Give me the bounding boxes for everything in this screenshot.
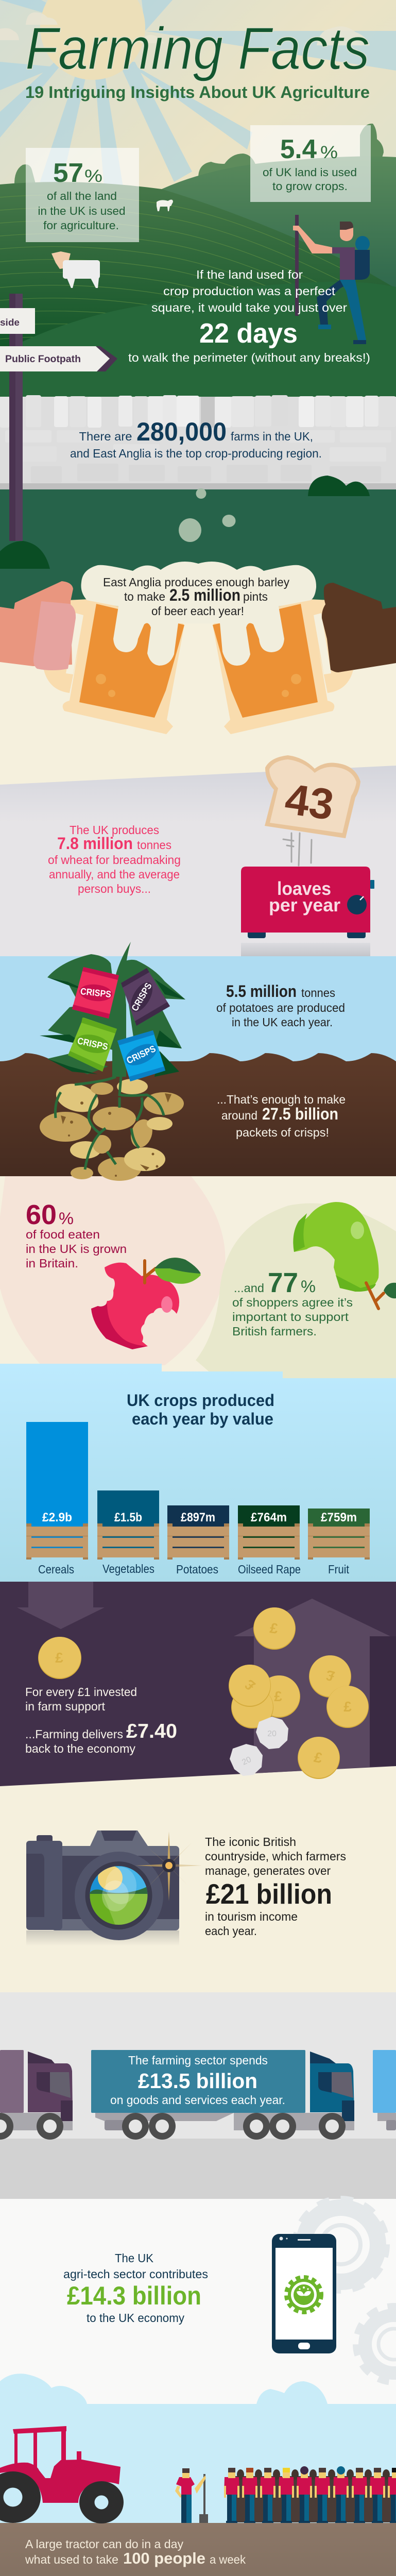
bar: vegetables xyxy=(97,1490,159,1560)
text: tractor fact: 100 people xyxy=(123,2549,205,2567)
icon: right beer mug xyxy=(213,599,353,734)
sun rays xyxy=(0,0,396,206)
callout: 57 percent xyxy=(26,148,139,242)
icon: smartphone xyxy=(272,2234,336,2353)
panel: fruit shoppers xyxy=(0,1176,396,1382)
text: farm count xyxy=(70,417,322,460)
coins: twenty pence xyxy=(230,1717,288,1776)
icon: purple crisps packet: CRISPS xyxy=(129,981,154,1013)
text: barley and beer: pints xyxy=(243,590,268,603)
back right hill xyxy=(162,157,396,330)
sign: countryside xyxy=(0,308,35,334)
icon: bitten apple xyxy=(91,1258,201,1349)
coins: returned pounds: £ xyxy=(274,1688,282,1704)
text: potato tonnes: 5.5 million xyxy=(226,982,297,1001)
bar: vegetables: £1.5b xyxy=(114,1511,142,1524)
icon: beer foam xyxy=(81,562,316,666)
chart title: UK crops produced xyxy=(127,1391,274,1410)
text: 77 percent: % xyxy=(301,1277,316,1296)
icon: small sheep xyxy=(157,200,173,211)
coins: returned pounds: £ xyxy=(269,1620,279,1637)
text: tourism income: in tourism income xyxy=(205,1910,298,1923)
text: crisp packets: packets of crisps! xyxy=(236,1126,329,1139)
text: tractor fact xyxy=(25,2537,246,2567)
pale backdrop circle xyxy=(196,1204,396,1382)
wall lower course xyxy=(5,430,391,483)
text: barley and beer: of beer each year! xyxy=(151,604,244,618)
icon: large gear watermark xyxy=(296,2199,396,2382)
trees on horizon xyxy=(14,124,384,185)
text: wheat xyxy=(48,823,181,895)
road xyxy=(0,2139,396,2199)
coin: single pound xyxy=(38,1637,81,1679)
icon: camera flash xyxy=(135,1832,202,1901)
bushes xyxy=(0,476,370,569)
text: barley and beer: East Anglia produces enough barley xyxy=(103,575,289,589)
coins: twenty pence: 20 xyxy=(267,1730,277,1738)
panel: signpost xyxy=(0,294,117,541)
icon: camera xyxy=(26,1831,202,1946)
text: 77 percent: ...and xyxy=(234,1281,264,1295)
icon: potatoes xyxy=(40,1079,184,1181)
callout: 5.4 percent: of UK land is used xyxy=(263,166,357,179)
text: barley and beer: to make xyxy=(124,590,165,603)
icon: farmer with fork xyxy=(175,2468,208,2523)
bar labels: Potatoes xyxy=(176,1563,218,1576)
text: barley and beer: 2.5 million xyxy=(169,586,240,604)
icon: tractor xyxy=(0,2426,124,2523)
icon: toast: 43 xyxy=(282,774,337,829)
text: tourism income xyxy=(205,1835,346,1938)
bar: oilseed rape: £764m xyxy=(251,1511,287,1524)
panel: wheat and bread xyxy=(0,755,396,956)
bar: potatoes xyxy=(167,1505,229,1560)
text: wheat: person buys... xyxy=(78,882,151,895)
text: farm support: back to the economy xyxy=(25,1742,136,1755)
text: tractor fact: what used to take xyxy=(25,2553,118,2566)
text: farm count: 280,000 xyxy=(136,417,227,446)
icon: toast xyxy=(265,755,360,838)
text: tourism income: countryside, which farmers xyxy=(205,1850,346,1863)
icon: red crisps packet xyxy=(72,967,119,1019)
text: crisp packets: ...That’s enough to make xyxy=(217,1093,346,1106)
coins: returned pounds: £ xyxy=(343,1699,352,1715)
icon: walker with staff xyxy=(293,215,370,344)
clouds xyxy=(0,2374,328,2404)
text block: 22 days to walk the perimeter: crop production was a perfect xyxy=(163,284,336,298)
text: farm count: There are xyxy=(79,430,132,443)
bar: fruit xyxy=(308,1509,370,1560)
panel: hero landscape xyxy=(0,0,396,420)
icon: centre truck xyxy=(95,2052,354,2140)
text: 60 percent xyxy=(26,1199,127,1270)
title: Farming Facts xyxy=(25,15,370,82)
text: crisp packets xyxy=(217,1093,346,1139)
icon: green crisps packet: CRISPS xyxy=(77,1036,109,1052)
text: agri-tech contribution: The UK xyxy=(115,2251,154,2265)
truck trailer with spend text: on goods and services each year. xyxy=(110,2093,285,2107)
icon: plant roots xyxy=(55,1077,164,1170)
bar labels: Vegetables xyxy=(102,1562,154,1575)
text block: 22 days to walk the perimeter: to walk the perimeter (without any breaks!) xyxy=(128,351,370,364)
text: 77 percent xyxy=(232,1267,353,1338)
truck trailer with spend text xyxy=(91,2050,305,2113)
wall upper stones xyxy=(0,395,396,428)
text: 60 percent: in Britain. xyxy=(26,1257,78,1270)
text: wheat: The UK produces xyxy=(70,823,159,837)
sun xyxy=(40,0,145,80)
panel: potatoes and crisps xyxy=(0,942,396,1181)
text: 77 percent: 77 xyxy=(268,1267,298,1298)
sign: countryside: side xyxy=(0,317,20,328)
text: tourism income: manage, generates over xyxy=(205,1864,331,1877)
left striped hill xyxy=(0,182,392,346)
ground xyxy=(0,2523,396,2576)
text: farm count: and East Anglia is the top crop-producing region. xyxy=(70,447,322,460)
text: wheat: 7.8 million xyxy=(57,834,133,853)
text: 77 percent: British farmers. xyxy=(232,1325,317,1338)
text: crisp packets: 27.5 billion xyxy=(262,1105,338,1123)
text: potato tonnes xyxy=(216,982,345,1029)
toast motion lines xyxy=(283,833,312,866)
callout: 57 percent: of all the land xyxy=(47,190,117,202)
callout: 5.4 percent xyxy=(250,125,371,202)
icon: left beer mug xyxy=(44,599,184,734)
icon: red crisps packet: CRISPS xyxy=(80,986,112,999)
text: agri-tech contribution xyxy=(63,2251,208,2325)
text: farm support: For every £1 invested xyxy=(25,1685,137,1699)
panel: crops bar chart xyxy=(0,1364,396,1582)
coins: returned pounds: £ xyxy=(324,1667,336,1685)
text: tractor fact: a week xyxy=(210,2553,246,2566)
text: crisp packets: around xyxy=(221,1109,257,1122)
coins: returned pounds: £ xyxy=(242,1676,258,1693)
callout: 5.4 percent: to grow crops. xyxy=(272,180,348,193)
text block: 22 days to walk the perimeter: square, it would take you just over xyxy=(151,301,347,314)
panel: stone wall and farm count xyxy=(0,395,396,490)
icon: toaster: loaves xyxy=(277,878,331,899)
icon: crowd of 100 people xyxy=(224,2466,396,2523)
arrow: down xyxy=(17,1582,105,1629)
text: farm support: £7.40 xyxy=(126,1720,177,1742)
chart title xyxy=(127,1391,274,1428)
icon: purple crisps packet xyxy=(121,968,170,1026)
bar: oilseed rape xyxy=(238,1505,300,1560)
icon: potato plant leaves and stem xyxy=(40,942,185,1077)
panel: agri-tech xyxy=(0,2199,396,2410)
bubbles xyxy=(179,488,236,542)
callout: 5.4 percent: % xyxy=(320,143,338,162)
callout: 5.4 percent: 5.4 xyxy=(280,134,317,164)
bar labels: Fruit xyxy=(328,1563,350,1576)
text block: 22 days to walk the perimeter: 22 days xyxy=(199,318,298,349)
arrow: up xyxy=(234,1599,390,1773)
text: tourism income: £21 billion xyxy=(206,1878,332,1910)
text: 60 percent: % xyxy=(59,1209,74,1228)
text: tourism income: The iconic British xyxy=(205,1835,296,1849)
callout: 57 percent: 57 xyxy=(53,158,83,188)
panel: tourism cream background xyxy=(0,1762,396,1992)
text: 60 percent: in the UK is grown xyxy=(26,1242,127,1256)
bar labels: Cereals xyxy=(38,1563,74,1576)
text: 77 percent: of shoppers agree it’s xyxy=(232,1296,353,1309)
text: farm count: farms in the UK, xyxy=(231,430,313,443)
bar: cereals: £2.9b xyxy=(42,1511,72,1524)
callout: 57 percent: in the UK is used xyxy=(38,205,126,217)
icon: right hand xyxy=(322,583,396,672)
text: 60 percent: 60 xyxy=(26,1199,57,1230)
text: potato tonnes: of potatoes are produced xyxy=(216,1001,345,1014)
bar: potatoes: £897m xyxy=(181,1511,215,1524)
coins: twenty pence: 20 xyxy=(240,1755,253,1767)
text: agri-tech contribution: £14.3 billion xyxy=(67,2281,201,2310)
bar: fruit: £759m xyxy=(321,1511,357,1524)
coin: single pound: £ xyxy=(55,1650,63,1666)
subtitle: 19 Intriguing Insights About UK Agriculture xyxy=(25,83,370,101)
chart title: each year by value xyxy=(132,1410,273,1428)
text: barley and beer xyxy=(103,575,289,618)
panel: farm support investment xyxy=(0,1582,396,1786)
front hill xyxy=(0,282,396,397)
icon: bitten pear xyxy=(293,1202,396,1309)
sign: public footpath: Public Footpath xyxy=(5,354,81,365)
text: farm support: ...Farming delivers xyxy=(25,1727,123,1741)
text: 60 percent: of food eaten xyxy=(26,1228,100,1241)
sign: public footpath xyxy=(0,346,117,371)
icon: left truck xyxy=(0,2050,73,2140)
icon: toaster: per year xyxy=(269,894,340,916)
coins: returned pounds xyxy=(229,1607,369,1779)
icon: green crisps packet xyxy=(68,1018,117,1072)
panel: trucks xyxy=(0,1992,396,2199)
icon: blue crisps packet xyxy=(117,1030,165,1081)
icon: toaster xyxy=(241,867,374,956)
text: tourism income: each year. xyxy=(205,1924,257,1938)
icon: potato indents and eyes xyxy=(61,1093,171,1177)
icon: sheep xyxy=(51,251,100,288)
text: potato tonnes: tonnes xyxy=(301,986,335,999)
bar: cereals xyxy=(26,1422,88,1560)
text: wheat: of wheat for breadmaking xyxy=(48,853,181,867)
text: agri-tech contribution: agri-tech sector contributes xyxy=(63,2267,208,2281)
icon: plant gear xyxy=(286,2277,321,2312)
callout: 57 percent: for agriculture. xyxy=(43,219,119,232)
text block: 22 days to walk the perimeter: If the land used for xyxy=(196,268,303,281)
coins: returned pounds: £ xyxy=(313,1749,324,1766)
soil xyxy=(0,1053,396,1176)
truck trailer with spend text: The farming sector spends xyxy=(128,2054,268,2067)
pink backdrop circle xyxy=(0,1176,226,1365)
text: wheat: tonnes xyxy=(137,838,171,852)
icon: right truck xyxy=(373,2050,396,2130)
text: potato tonnes: in the UK each year. xyxy=(232,1015,333,1029)
text: agri-tech contribution: to the UK economy xyxy=(87,2311,184,2325)
bar labels: Oilseed Rape xyxy=(238,1563,301,1576)
clouds xyxy=(0,12,370,45)
text: farm support xyxy=(25,1685,177,1755)
text: wheat: annually, and the average xyxy=(49,868,180,881)
text: farm support: in farm support xyxy=(25,1700,106,1713)
text block: 22 days to walk the perimeter xyxy=(128,268,370,364)
truck trailer with spend text: £13.5 billion xyxy=(138,2069,257,2093)
bar labels xyxy=(38,1562,350,1576)
icon: blue crisps packet: CRISPS xyxy=(125,1043,157,1066)
text: tractor fact: A large tractor can do in a day xyxy=(25,2537,183,2551)
panel: tractor versus people xyxy=(0,2374,396,2576)
panel: tourism camera xyxy=(26,1831,346,1946)
callout: 57 percent: % xyxy=(84,166,102,186)
icon: left hand xyxy=(0,581,76,670)
text: 77 percent: important to support xyxy=(232,1310,349,1324)
panel: beer and barley xyxy=(0,476,396,790)
